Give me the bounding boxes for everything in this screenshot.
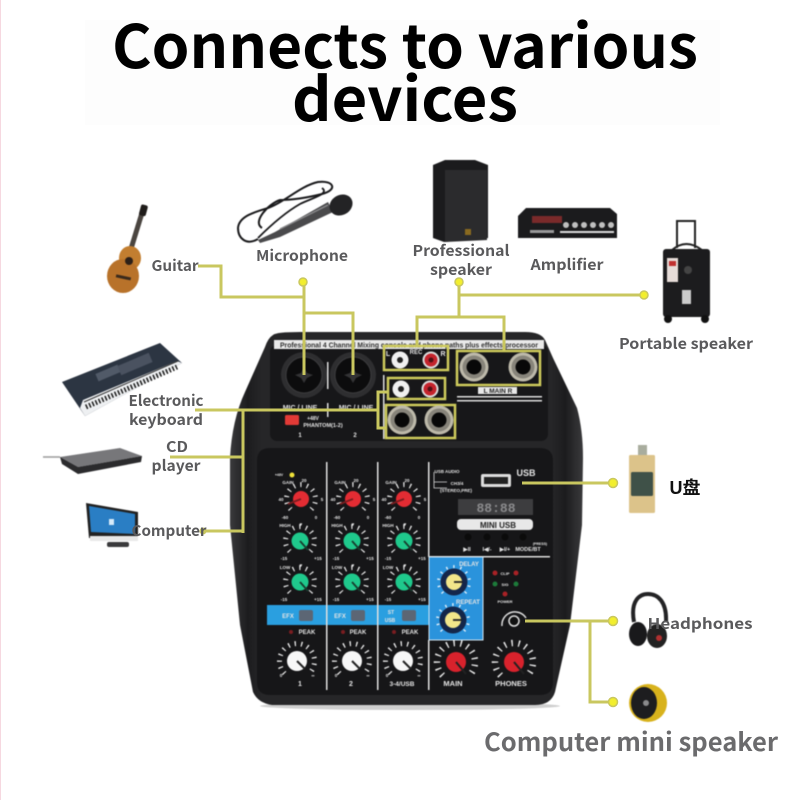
- blue effects panel: DELAY: [459, 562, 479, 568]
- mic inputs: MIC / LINE: [283, 405, 318, 412]
- label: computer: Computer: [132, 520, 207, 541]
- USB and display section: I◀/-: [482, 546, 492, 553]
- mixer shadow: [260, 702, 560, 710]
- USB and display section: MINI USB: [480, 521, 516, 530]
- USB and display section: ▶I/+: [499, 546, 510, 553]
- LEDs and phones jack: [492, 570, 526, 626]
- label: headphones: Headphones: [648, 613, 752, 634]
- channel knobs: +48V: [275, 473, 284, 477]
- icon: headphones: [629, 594, 667, 648]
- mic inputs: PHANTOM(1-2): [303, 423, 343, 429]
- icon: USB drive: [629, 445, 655, 513]
- channel knobs: HIGH: [331, 523, 343, 528]
- label: portable speaker: Portable speaker: [619, 333, 753, 354]
- channel knobs: 1: [298, 681, 302, 688]
- USB and display section: [429, 468, 550, 558]
- blue EFX strip: USB: [385, 618, 396, 624]
- icon: mini speaker: [629, 684, 667, 722]
- channel knobs: PEAK: [299, 630, 316, 636]
- blue EFX strip: EFX: [282, 614, 294, 620]
- channel knobs: HIGH: [382, 523, 394, 528]
- mixer: [230, 332, 583, 710]
- icon: portable speaker: [663, 221, 710, 323]
- main and phones knobs: MAIN: [443, 679, 463, 688]
- brand strip: Professional 4 Channel Mixing console and phone paths plus effects processor: [280, 342, 538, 350]
- label: computer mini speaker: Computer mini speaker: [484, 723, 778, 759]
- icon: guitar: [107, 204, 148, 293]
- label: amplifier: Amplifier: [529, 254, 604, 275]
- USB and display section: USB AUDIO: [434, 469, 460, 474]
- control panel: [257, 448, 553, 695]
- main and phones knobs: PHONES: [495, 679, 527, 688]
- USB and display section: CH3/4: [451, 481, 464, 486]
- blue EFX strip: EFX: [334, 614, 346, 620]
- mic inputs: 1: [298, 433, 302, 439]
- main and phones knobs: [437, 643, 533, 688]
- LEDs and phones jack: POWER: [497, 599, 513, 604]
- USB and display section: (STEREO,PRE): [440, 488, 472, 493]
- label: CD player: player: [152, 455, 201, 476]
- channel dividers: [326, 462, 430, 690]
- RCA and jack sockets: [383, 346, 542, 439]
- icon: microphone: [238, 182, 356, 243]
- blue effects panel: REPEAT: [456, 600, 480, 606]
- blue EFX strip: ST: [388, 610, 394, 616]
- icon: amplifier: [518, 208, 617, 238]
- channel knobs: HIGH: [279, 523, 291, 528]
- RCA and jack sockets: L: [386, 351, 391, 358]
- LEDs and phones jack: SIG: [502, 582, 508, 587]
- connection wires: microphone and guitar: [198, 266, 353, 375]
- label: electronic keyboard: Electronic: [128, 390, 204, 411]
- connection wires: headphones and mini speaker: [525, 616, 618, 706]
- channel knobs: LOW: [332, 565, 343, 570]
- label: professional speaker: speaker: [430, 259, 492, 280]
- mic inputs: +48V: [307, 416, 320, 422]
- mic inputs: [281, 352, 376, 439]
- mic inputs: 2: [353, 433, 357, 439]
- USB and display section: 88:88: [476, 501, 516, 516]
- icon: electronic keyboard: [62, 343, 182, 416]
- icon: CD player: [43, 448, 142, 474]
- label: CD player: [152, 436, 201, 476]
- RCA and jack sockets: REC: [410, 350, 423, 356]
- label: guitar: Guitar: [152, 255, 199, 276]
- channel knobs: 2: [349, 681, 353, 688]
- label: electronic keyboard: [128, 390, 204, 430]
- title: Connects to various: [112, 0, 698, 86]
- USB and display section: MODE/BT: [515, 547, 541, 553]
- label: U disk: U盘: [670, 477, 700, 498]
- mixer body: [230, 332, 583, 705]
- LEDs and phones jack: CLIP: [500, 571, 510, 576]
- blue effects panel: [429, 557, 483, 640]
- connection wire: USB: [522, 478, 618, 488]
- label: microphone: Microphone: [256, 245, 348, 266]
- title: devices: [292, 52, 518, 139]
- USB and display section: ▶II: [462, 546, 471, 553]
- channel knobs: 3-4/USB: [390, 681, 415, 688]
- label: electronic keyboard: keyboard: [129, 409, 203, 430]
- RCA and jack sockets: L MAIN R: [484, 388, 513, 395]
- label: professional speaker: [412, 240, 510, 280]
- channel knobs: [275, 472, 427, 688]
- channel knobs: PEAK: [402, 630, 419, 636]
- channel knobs: LOW: [280, 565, 291, 570]
- rear panel: [270, 345, 548, 441]
- USB and display section: USB: [516, 468, 536, 478]
- connection wires: speakers: [417, 278, 648, 351]
- label: professional speaker: Professional: [412, 240, 510, 261]
- mic inputs: MIC / LINE: [339, 405, 374, 412]
- title: [85, 0, 720, 139]
- blue EFX strip: [267, 605, 429, 625]
- channel knobs: PEAK: [350, 630, 367, 636]
- USB and display section: (PRESS): [533, 542, 547, 546]
- icon: computer: [86, 503, 138, 547]
- RCA and jack sockets: R: [440, 351, 446, 358]
- icon: professional speaker: [433, 160, 488, 242]
- label: CD player: CD: [166, 436, 188, 457]
- channel knobs: LOW: [383, 565, 394, 570]
- connection wires: line inputs: [170, 392, 388, 534]
